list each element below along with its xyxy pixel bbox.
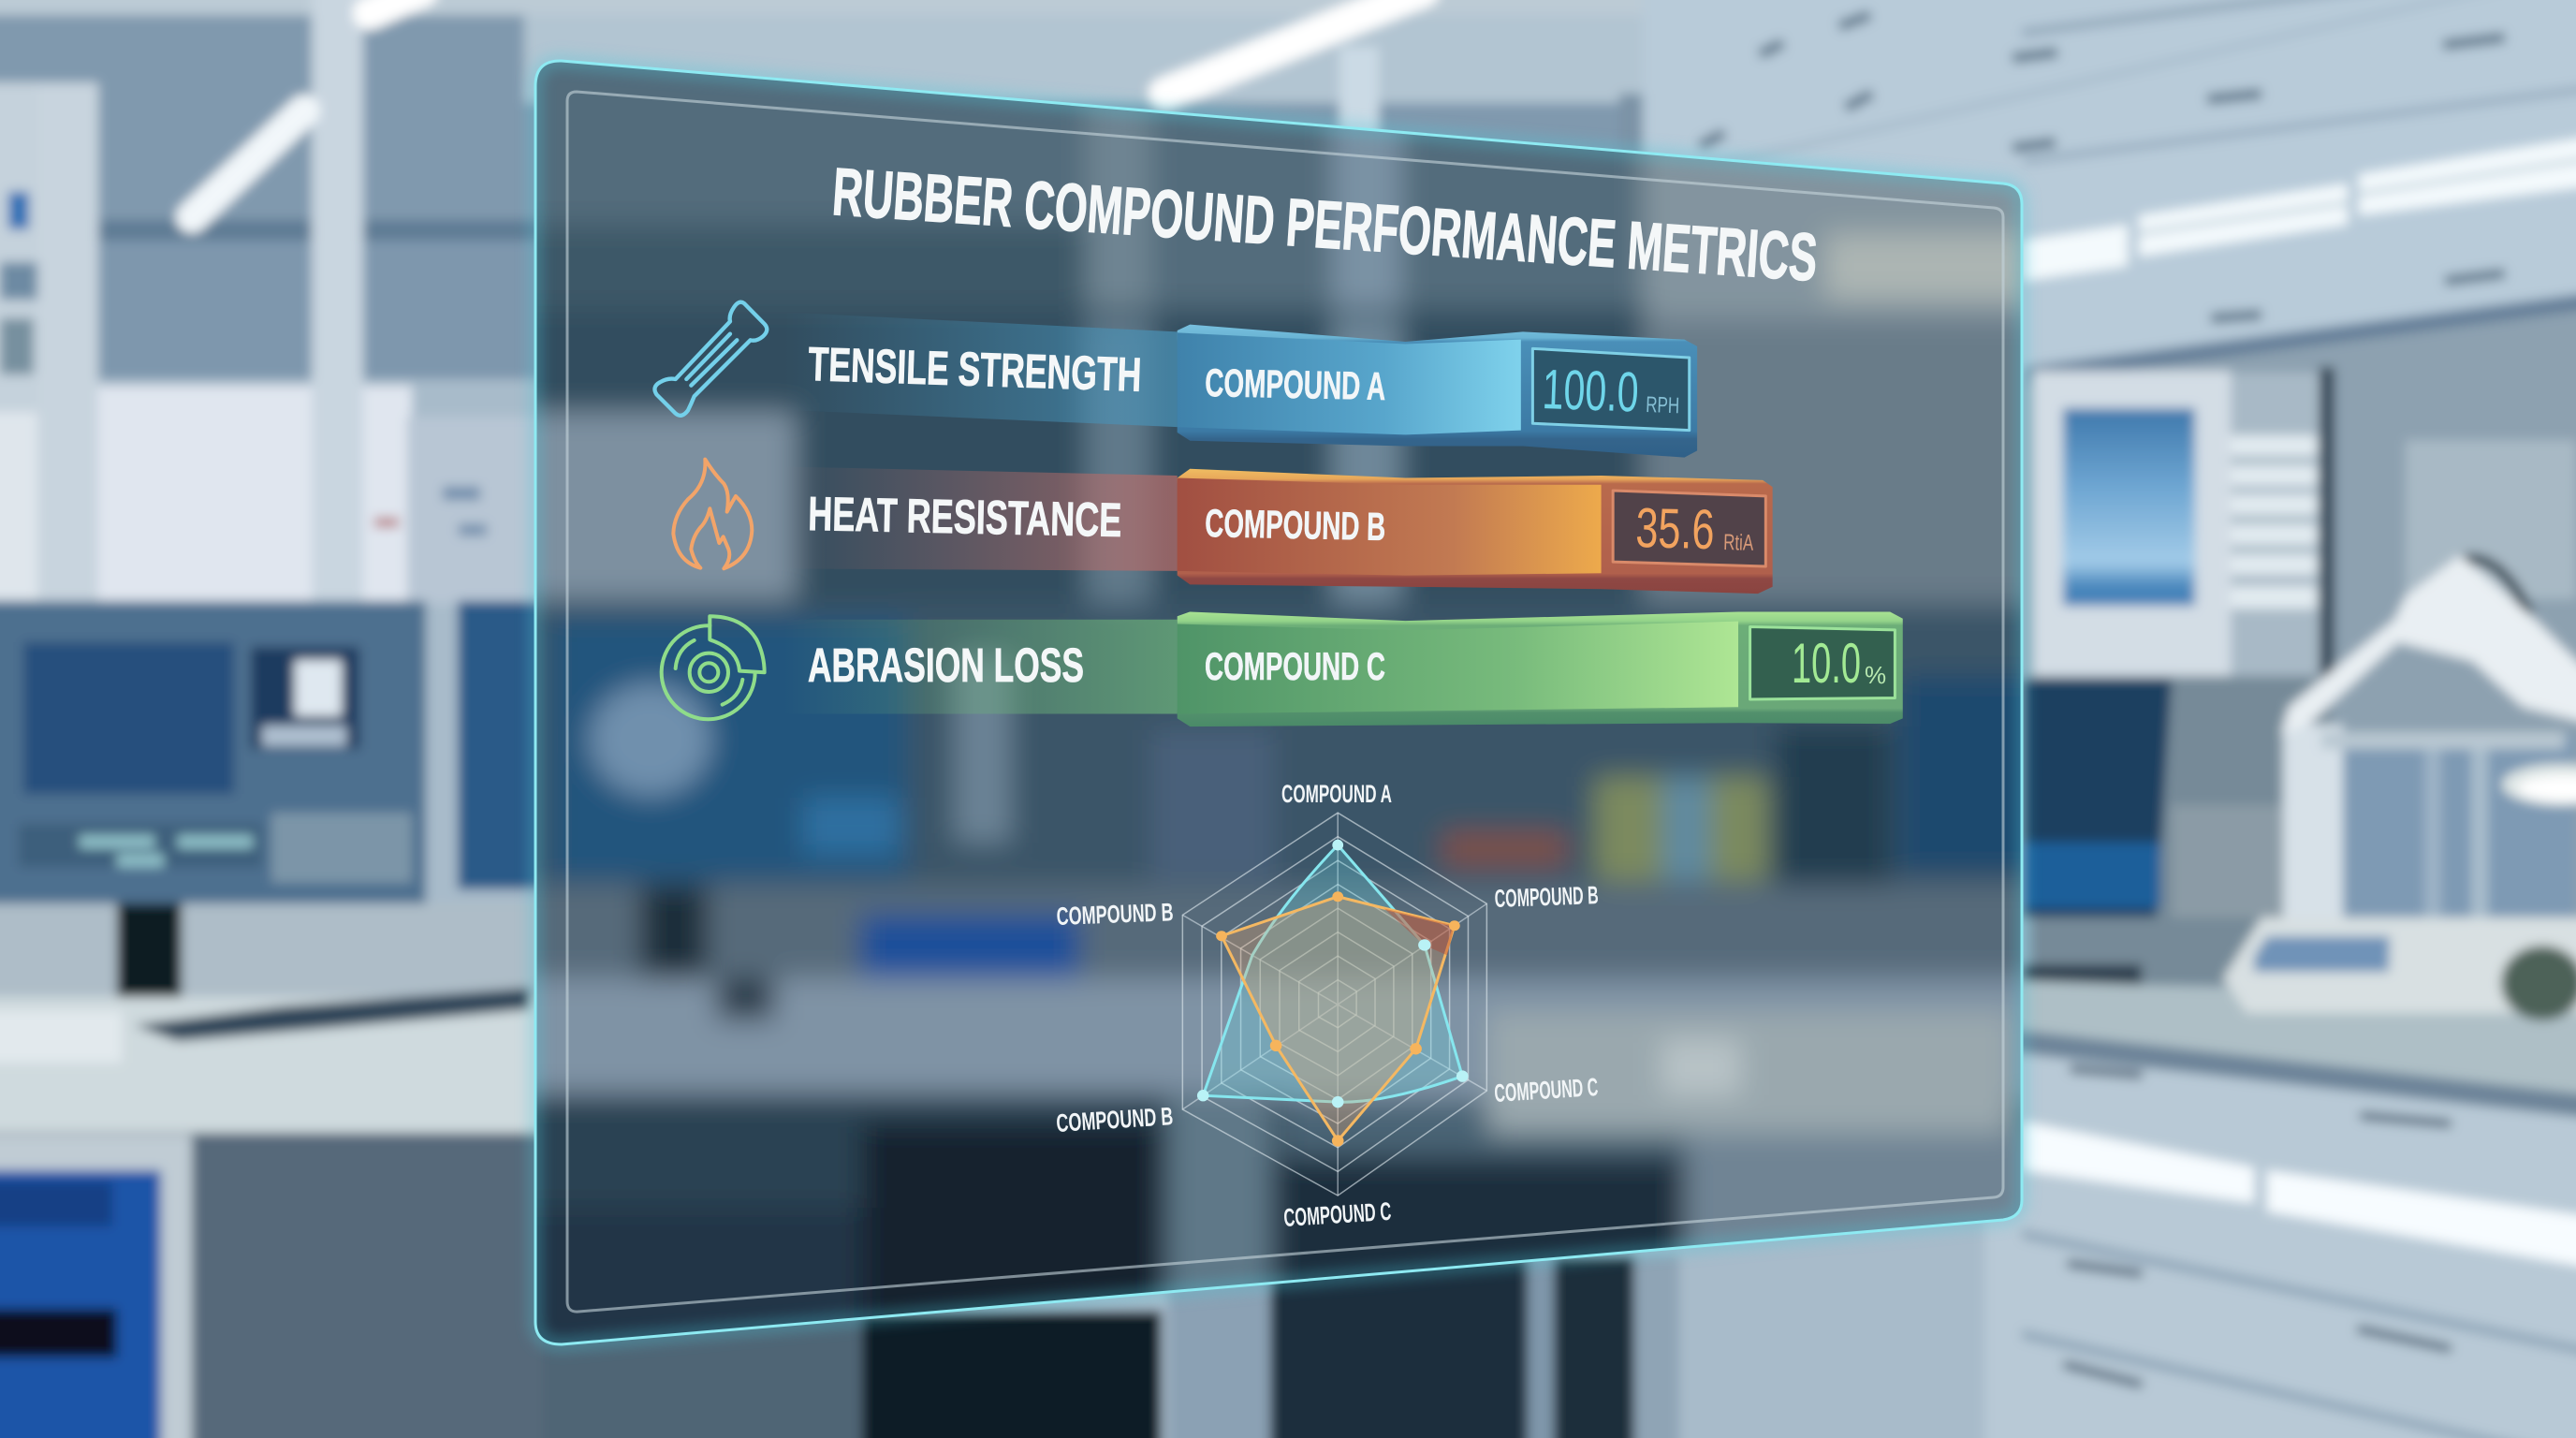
drawers (1984, 1030, 2576, 1438)
icon: flame (673, 460, 752, 568)
balance enclosure (2283, 725, 2343, 921)
lower dark (537, 1082, 1289, 1281)
label: compound b: COMPOUND B (1205, 501, 1386, 549)
left shelving (0, 82, 98, 607)
panel inner frame (567, 92, 2003, 1312)
row 1: tensile strength (654, 302, 1697, 458)
panel: glass display (505, 37, 2050, 1367)
panel backdrop (505, 37, 2050, 1367)
right upper cabinets (1643, 0, 2576, 384)
icon: tensile test specimen (654, 302, 767, 416)
left monitors (0, 601, 426, 903)
robot arm (2281, 555, 2576, 734)
desk (0, 997, 562, 1133)
panel outer glow (535, 61, 2022, 1344)
data points (1216, 891, 1460, 1147)
band: tensile strength bar (783, 313, 1697, 458)
counter and balance (1984, 979, 2576, 1095)
value: 100.0: 100.0 (1542, 358, 1640, 424)
unit: RtiA: RtiA (1723, 530, 1754, 556)
radar label: compound c lower right: COMPOUND C (1493, 1073, 1599, 1108)
right recess (2024, 309, 2576, 1039)
series: cyan (1203, 845, 1462, 1102)
icon: brake disc (662, 616, 765, 719)
radar label: compound b upper right: COMPOUND B (1494, 881, 1599, 913)
radar chart (1055, 780, 1599, 1232)
lower cabinets (0, 1133, 562, 1438)
band: heat resistance bar (783, 466, 1773, 594)
series: orange (1222, 897, 1455, 1140)
unit: percent: % (1865, 661, 1886, 689)
label: abrasion loss: ABRASION LOSS (808, 638, 1084, 692)
row 3: abrasion loss (662, 611, 1903, 726)
unit: RPH: RPH (1646, 392, 1680, 418)
radar grid and series (1182, 813, 1486, 1196)
mid band (505, 604, 2050, 885)
radar label: compound a top: COMPOUND A (1281, 780, 1392, 808)
ceiling and rear wall (0, 0, 1666, 220)
desk band (505, 978, 2050, 1100)
value: 35.6: 35.6 (1635, 496, 1715, 561)
label: compound c: COMPOUND C (1205, 644, 1385, 688)
label: heat resistance: HEAT RESISTANCE (808, 487, 1122, 547)
radar label: compound b upper left: COMPOUND B (1056, 898, 1174, 931)
value: 10.0: 10.0 (1792, 632, 1861, 695)
label: compound a: COMPOUND A (1205, 360, 1386, 408)
label: tensile strength: TENSILE STRENGTH (808, 337, 1142, 402)
bottom centre (543, 1311, 866, 1438)
panel outer edge (535, 61, 2022, 1344)
row 2: heat resistance (673, 460, 1773, 594)
radar label: compound b lower left: COMPOUND B (1055, 1102, 1174, 1137)
radar label: compound c bottom: COMPOUND C (1282, 1197, 1392, 1232)
right monitor (2020, 679, 2172, 917)
title: RUBBER COMPOUND PERFORMANCE METRICS (830, 154, 1820, 296)
band: abrasion loss bar (783, 611, 1903, 726)
